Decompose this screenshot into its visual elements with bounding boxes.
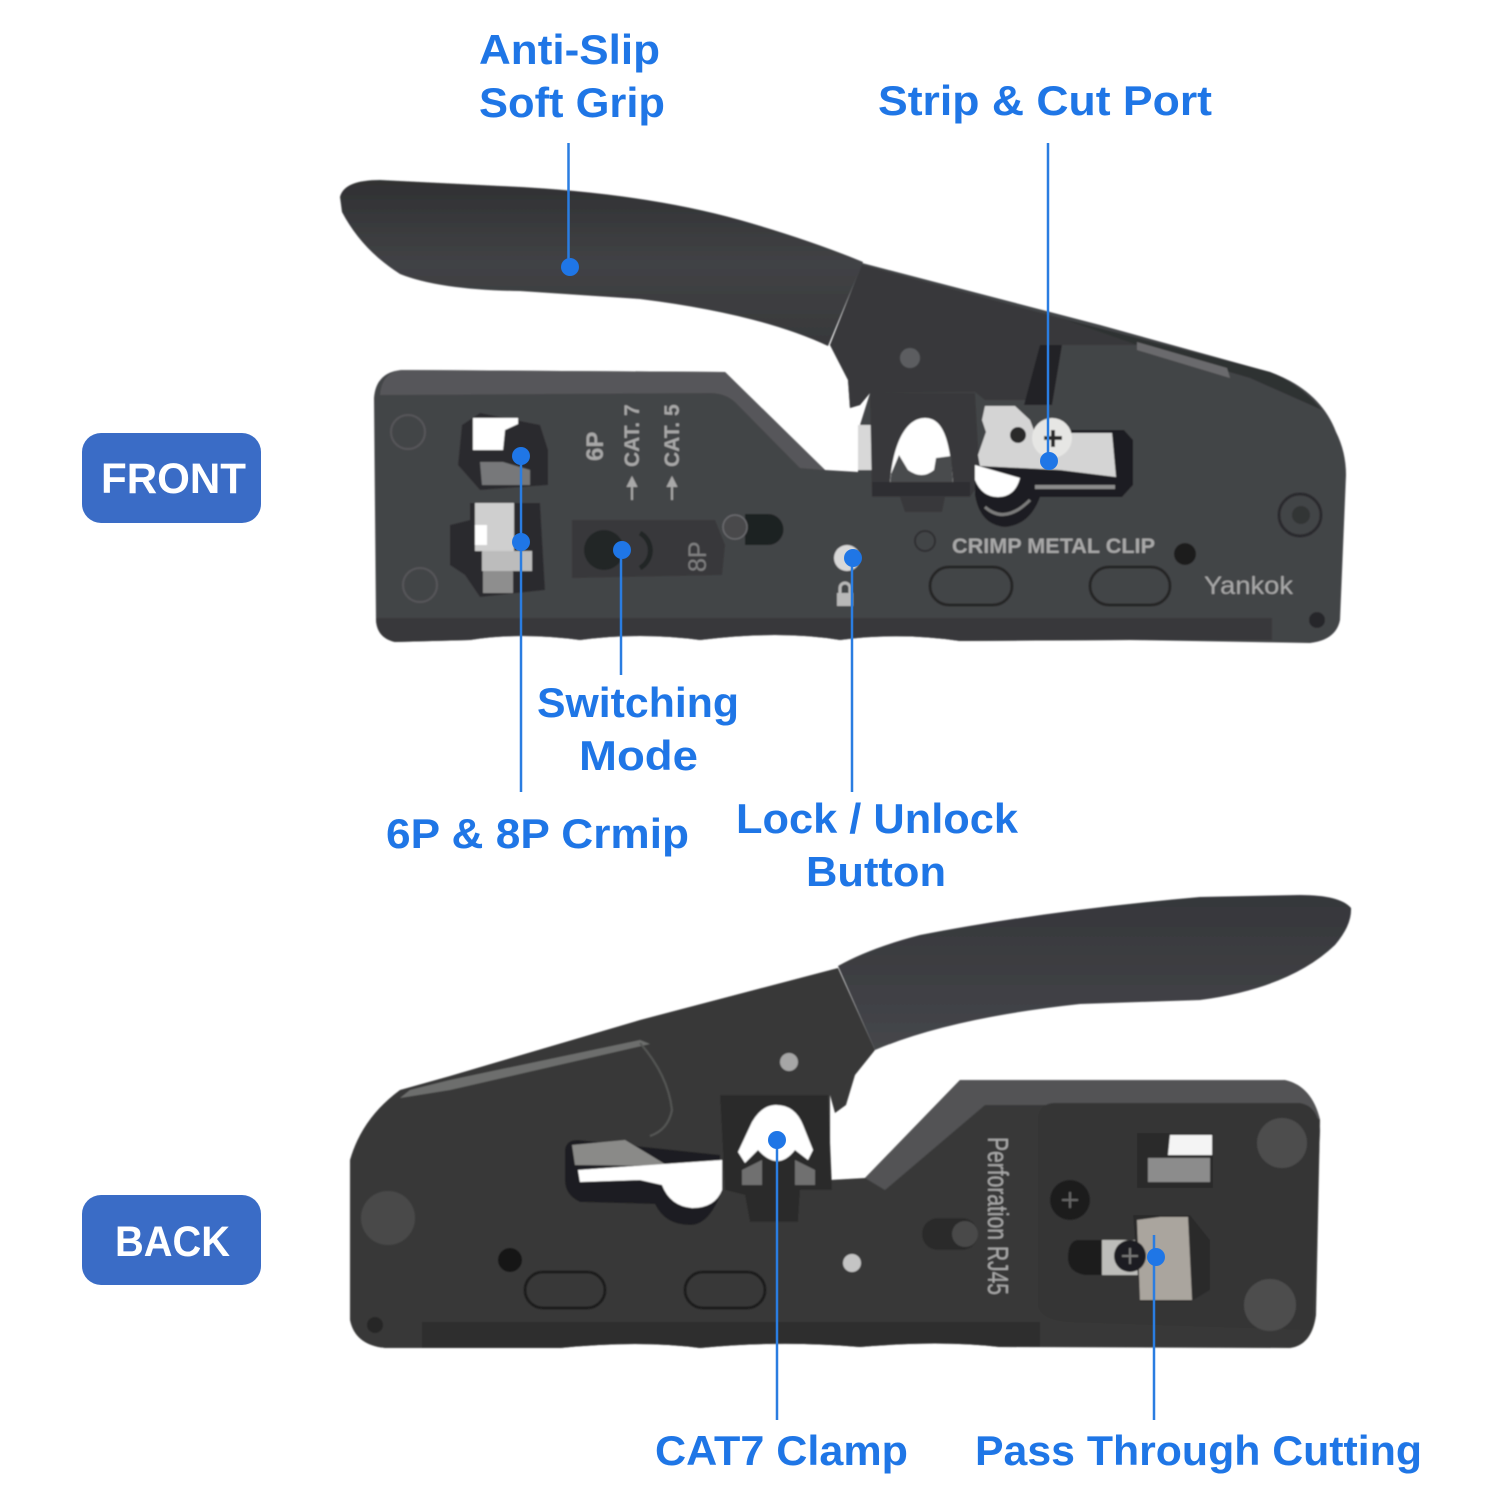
back inset plate	[1038, 1103, 1320, 1331]
heading: CAT7 clamp: CAT7 Clamp	[655, 1427, 908, 1474]
front arm top band	[1060, 318, 1322, 410]
perforation RJ45 engraving: Perforation RJ45	[981, 1137, 1013, 1295]
crimp metal clip engraving: CRIMP METAL CLIP	[952, 535, 1155, 558]
front jaw block	[858, 393, 980, 512]
back bottom rail	[422, 1322, 1040, 1348]
brand mark: Yankok	[1204, 572, 1294, 600]
front tool body and arm	[374, 263, 1346, 643]
back anti-slip grip	[838, 895, 1351, 1050]
heading: lock unlock button: Button	[806, 848, 946, 895]
heading: switching mode: Switching	[537, 679, 739, 726]
CAT7 clamp jaw	[720, 1095, 832, 1222]
heading: switching mode: Mode	[579, 732, 698, 779]
back rim	[865, 1080, 1320, 1190]
heading: anti-slip soft grip: Soft Grip	[479, 79, 665, 126]
back tool body and arm	[350, 968, 1320, 1348]
heading: anti-slip soft grip: Anti-Slip	[479, 26, 660, 73]
heading: 6P and 8P crimp: 6P & 8P Crmip	[386, 810, 689, 857]
front arm dark edge	[1024, 345, 1062, 405]
front cutting slot	[975, 430, 1133, 527]
back upper socket	[1137, 1133, 1213, 1188]
front bottom rail	[376, 618, 1272, 642]
FRONT badge	[82, 433, 261, 523]
lock button	[834, 545, 860, 606]
FRONT badge: FRONT	[101, 455, 246, 503]
callout line: pass through cutting	[1147, 1235, 1165, 1420]
back corner discs	[1257, 1118, 1307, 1168]
back plate screw	[1050, 1180, 1090, 1220]
front arm highlight stripe	[1137, 342, 1230, 378]
front view crimping tool	[340, 180, 1346, 643]
switching mode plate	[572, 520, 725, 578]
switching mode plate: 8P	[684, 541, 712, 572]
callout line: lock button	[844, 549, 862, 792]
pass through cutting blade	[1068, 1215, 1210, 1302]
front engraved arrows	[628, 478, 676, 500]
BACK badge	[82, 1195, 261, 1285]
front engraved CAT.5 text: CAT. 5	[661, 404, 684, 467]
front upper crimp socket	[458, 413, 548, 490]
front top rim	[380, 370, 825, 470]
back view crimping tool	[350, 895, 1351, 1348]
heading: pass through cutting: Pass Through Cutting	[975, 1427, 1422, 1474]
heading: strip and cut port: Strip & Cut Port	[878, 77, 1212, 124]
back highlight stripe	[400, 1040, 650, 1098]
heading: lock unlock button: Lock / Unlock	[736, 795, 1019, 842]
callout line: 6P and 8P crimp	[512, 447, 530, 792]
heading: anti-slip soft grip	[479, 26, 665, 126]
callout line: anti-slip grip	[561, 143, 579, 276]
strip and cut blade	[978, 406, 1116, 477]
back pivot	[780, 1053, 798, 1071]
front small features	[915, 494, 1325, 628]
BACK badge: BACK	[115, 1218, 230, 1266]
back arm contour	[640, 1043, 672, 1136]
front corner screws	[391, 415, 437, 602]
switching slot	[723, 514, 784, 545]
back small features	[361, 1191, 978, 1333]
front upper arm	[830, 265, 1137, 408]
callout line: switching mode	[613, 541, 631, 675]
front engraved CAT.7 text: CAT. 7	[621, 404, 644, 467]
heading: switching mode	[537, 679, 739, 779]
callout line: strip and cut port	[1040, 143, 1058, 470]
front anti-slip grip	[340, 180, 863, 346]
front engraved 6P text: 6P	[582, 432, 609, 461]
front lower crimp socket	[450, 503, 545, 597]
callout line: CAT7 clamp	[768, 1131, 786, 1420]
heading: lock unlock button	[736, 795, 1019, 895]
back cutting slot	[565, 1140, 722, 1225]
front arm pivot	[900, 348, 920, 368]
